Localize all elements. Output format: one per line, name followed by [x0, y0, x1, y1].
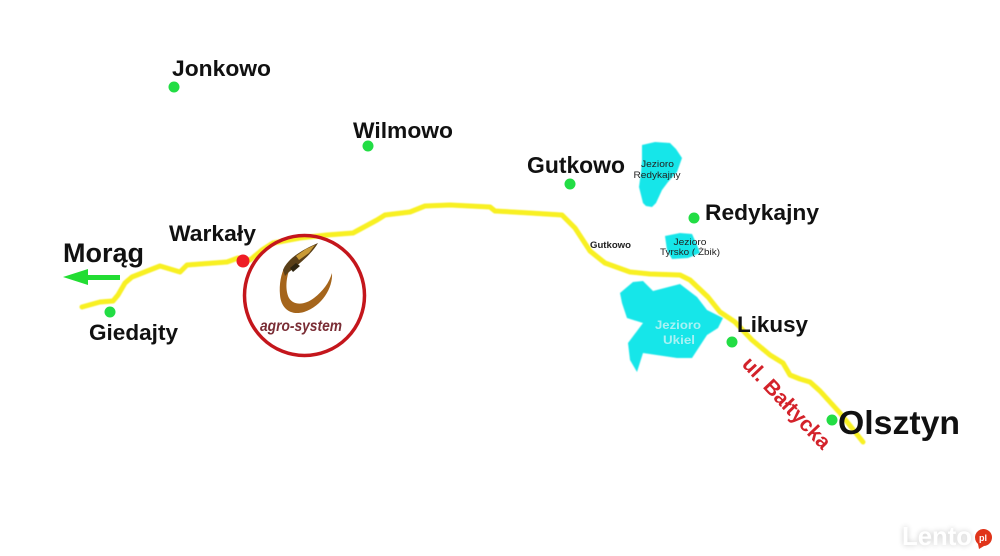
lake: Jezioro Redykajny [634, 142, 682, 207]
label: Wilmowo: Wilmowo [353, 118, 453, 143]
label: Redykajny: Redykajny [705, 200, 819, 225]
label: Warkały: Warkały [169, 221, 256, 246]
lake: Jezioro Redykajny: Redykajny [634, 170, 681, 181]
label: Morąg: Morąg [63, 238, 144, 268]
arrow: green left [63, 269, 120, 285]
lake: Jezioro Redykajny: Jezioro [641, 159, 674, 170]
lake: Jezioro Tyrsko (Żbik) [660, 233, 720, 259]
marker: Olsztyn [826, 414, 838, 426]
road label: Gutkowo: Gutkowo [590, 240, 631, 251]
marker: Jonkowo [168, 82, 180, 92]
icon: wheat ear [280, 243, 332, 313]
text: agro-system: agro-system [260, 318, 342, 335]
marker: Warkały red [236, 254, 250, 268]
logo: agro-system [244, 236, 364, 356]
lake: Jezioro Ukiel: Ukiel [663, 333, 695, 347]
road: yellow main route [82, 205, 863, 442]
lake: Jezioro Ukiel: Jezioro [655, 318, 701, 332]
label: Olsztyn: Olsztyn [838, 404, 960, 441]
marker: Giedajty [104, 306, 116, 318]
marker: Wilmowo [362, 140, 374, 152]
lake: Jezioro Ukiel [620, 281, 723, 372]
watermark: Lento.pl: Lento [902, 521, 972, 551]
watermark: Lento.pl: Lento [902, 521, 972, 551]
marker: Gutkowo [564, 178, 576, 190]
label: Gutkowo: Gutkowo [527, 152, 625, 178]
label: Likusy: Likusy [737, 312, 808, 337]
label: Jonkowo: Jonkowo [172, 56, 271, 81]
street label: ul. Bałtycka: ul. Bałtycka [737, 353, 835, 454]
lake: Jezioro Tyrsko (Żbik): Jezioro [674, 237, 706, 248]
marker: Redykajny [688, 212, 700, 224]
icon: pl speech bubble: pl [979, 533, 987, 543]
marker: Likusy [726, 336, 738, 348]
label: Giedajty: Giedajty [89, 320, 178, 345]
lake: Jezioro Tyrsko (Żbik): Tyrsko ( Żbik) [660, 247, 720, 258]
